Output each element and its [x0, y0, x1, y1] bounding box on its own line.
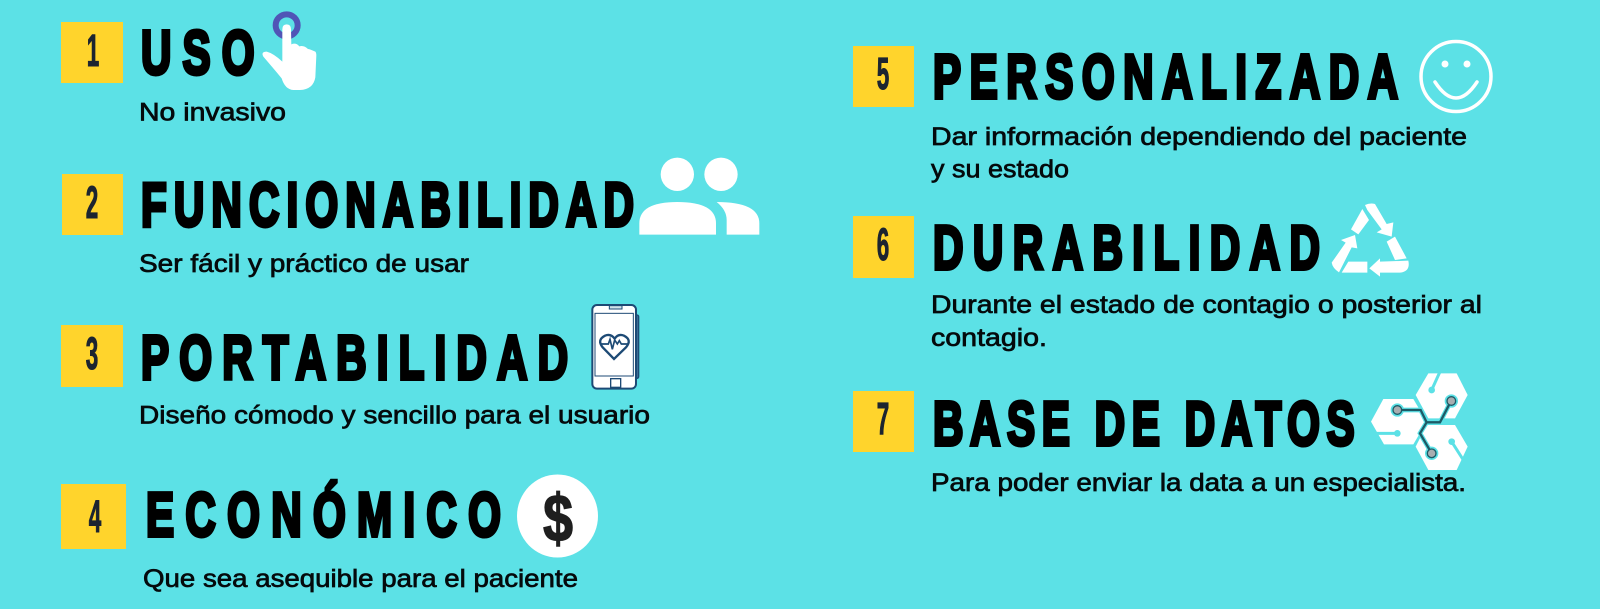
- item 1: uso: No invasivo: [139, 98, 286, 126]
- icon: two people: [639, 158, 759, 235]
- item 1: uso: 1: [87, 26, 99, 76]
- item 6: durabilidad: Durante el estado de contagio o posterior al: [931, 291, 1482, 319]
- item 4: economico: 4: [89, 492, 101, 542]
- item 6: durabilidad: DURABILIDAD: [933, 214, 1320, 283]
- item 4: economico: ECONÓMICO: [146, 480, 501, 550]
- icon: smiley: [1421, 42, 1491, 112]
- icon: phone with heart: [592, 305, 639, 389]
- item 5: personalizada: Dar información dependiendo del paciente: [931, 123, 1467, 151]
- icon: pointing hand: [263, 14, 316, 90]
- icon: molecule hexagons: [1370, 372, 1468, 470]
- item 7: base de datos: BASE DE DATOS: [933, 390, 1355, 459]
- item 7: base de datos: [853, 372, 1468, 497]
- item 1: uso: [61, 14, 316, 126]
- item 5: personalizada: PERSONALIZADA: [933, 43, 1398, 112]
- item 4: economico: Que sea asequible para el paciente: [143, 565, 578, 593]
- item 3: portabilidad: Diseño cómodo y sencillo para el usuario: [139, 402, 650, 430]
- icon: dollar coin: [517, 474, 598, 558]
- item 6: durabilidad: contagio.: [931, 324, 1047, 352]
- item 5: personalizada: [853, 42, 1491, 184]
- item 3: portabilidad: 3: [86, 329, 98, 379]
- item 2: funcionabilidad: FUNCIONABILIDAD: [141, 171, 634, 240]
- item 2: funcionabilidad: Ser fácil y práctico de usar: [139, 250, 469, 278]
- item 1: uso: USO: [141, 19, 255, 88]
- item 5: personalizada: 5: [877, 49, 889, 99]
- item 5: personalizada: y su estado: [931, 156, 1069, 184]
- item 6: durabilidad: [853, 204, 1482, 352]
- item 6: durabilidad: 6: [877, 220, 889, 270]
- item 2: funcionabilidad: 2: [86, 178, 98, 228]
- item 3: portabilidad: PORTABILIDAD: [141, 324, 568, 393]
- item 7: base de datos: Para poder enviar la data a un especialista.: [931, 469, 1466, 497]
- item 7: base de datos: 7: [877, 394, 889, 444]
- item 2: funcionabilidad: [62, 158, 759, 278]
- item 4: economico: [61, 474, 598, 593]
- item 3: portabilidad: [61, 305, 650, 430]
- icon: dollar coin: $: [543, 480, 573, 555]
- icon: recycle arrows: [1332, 204, 1409, 277]
